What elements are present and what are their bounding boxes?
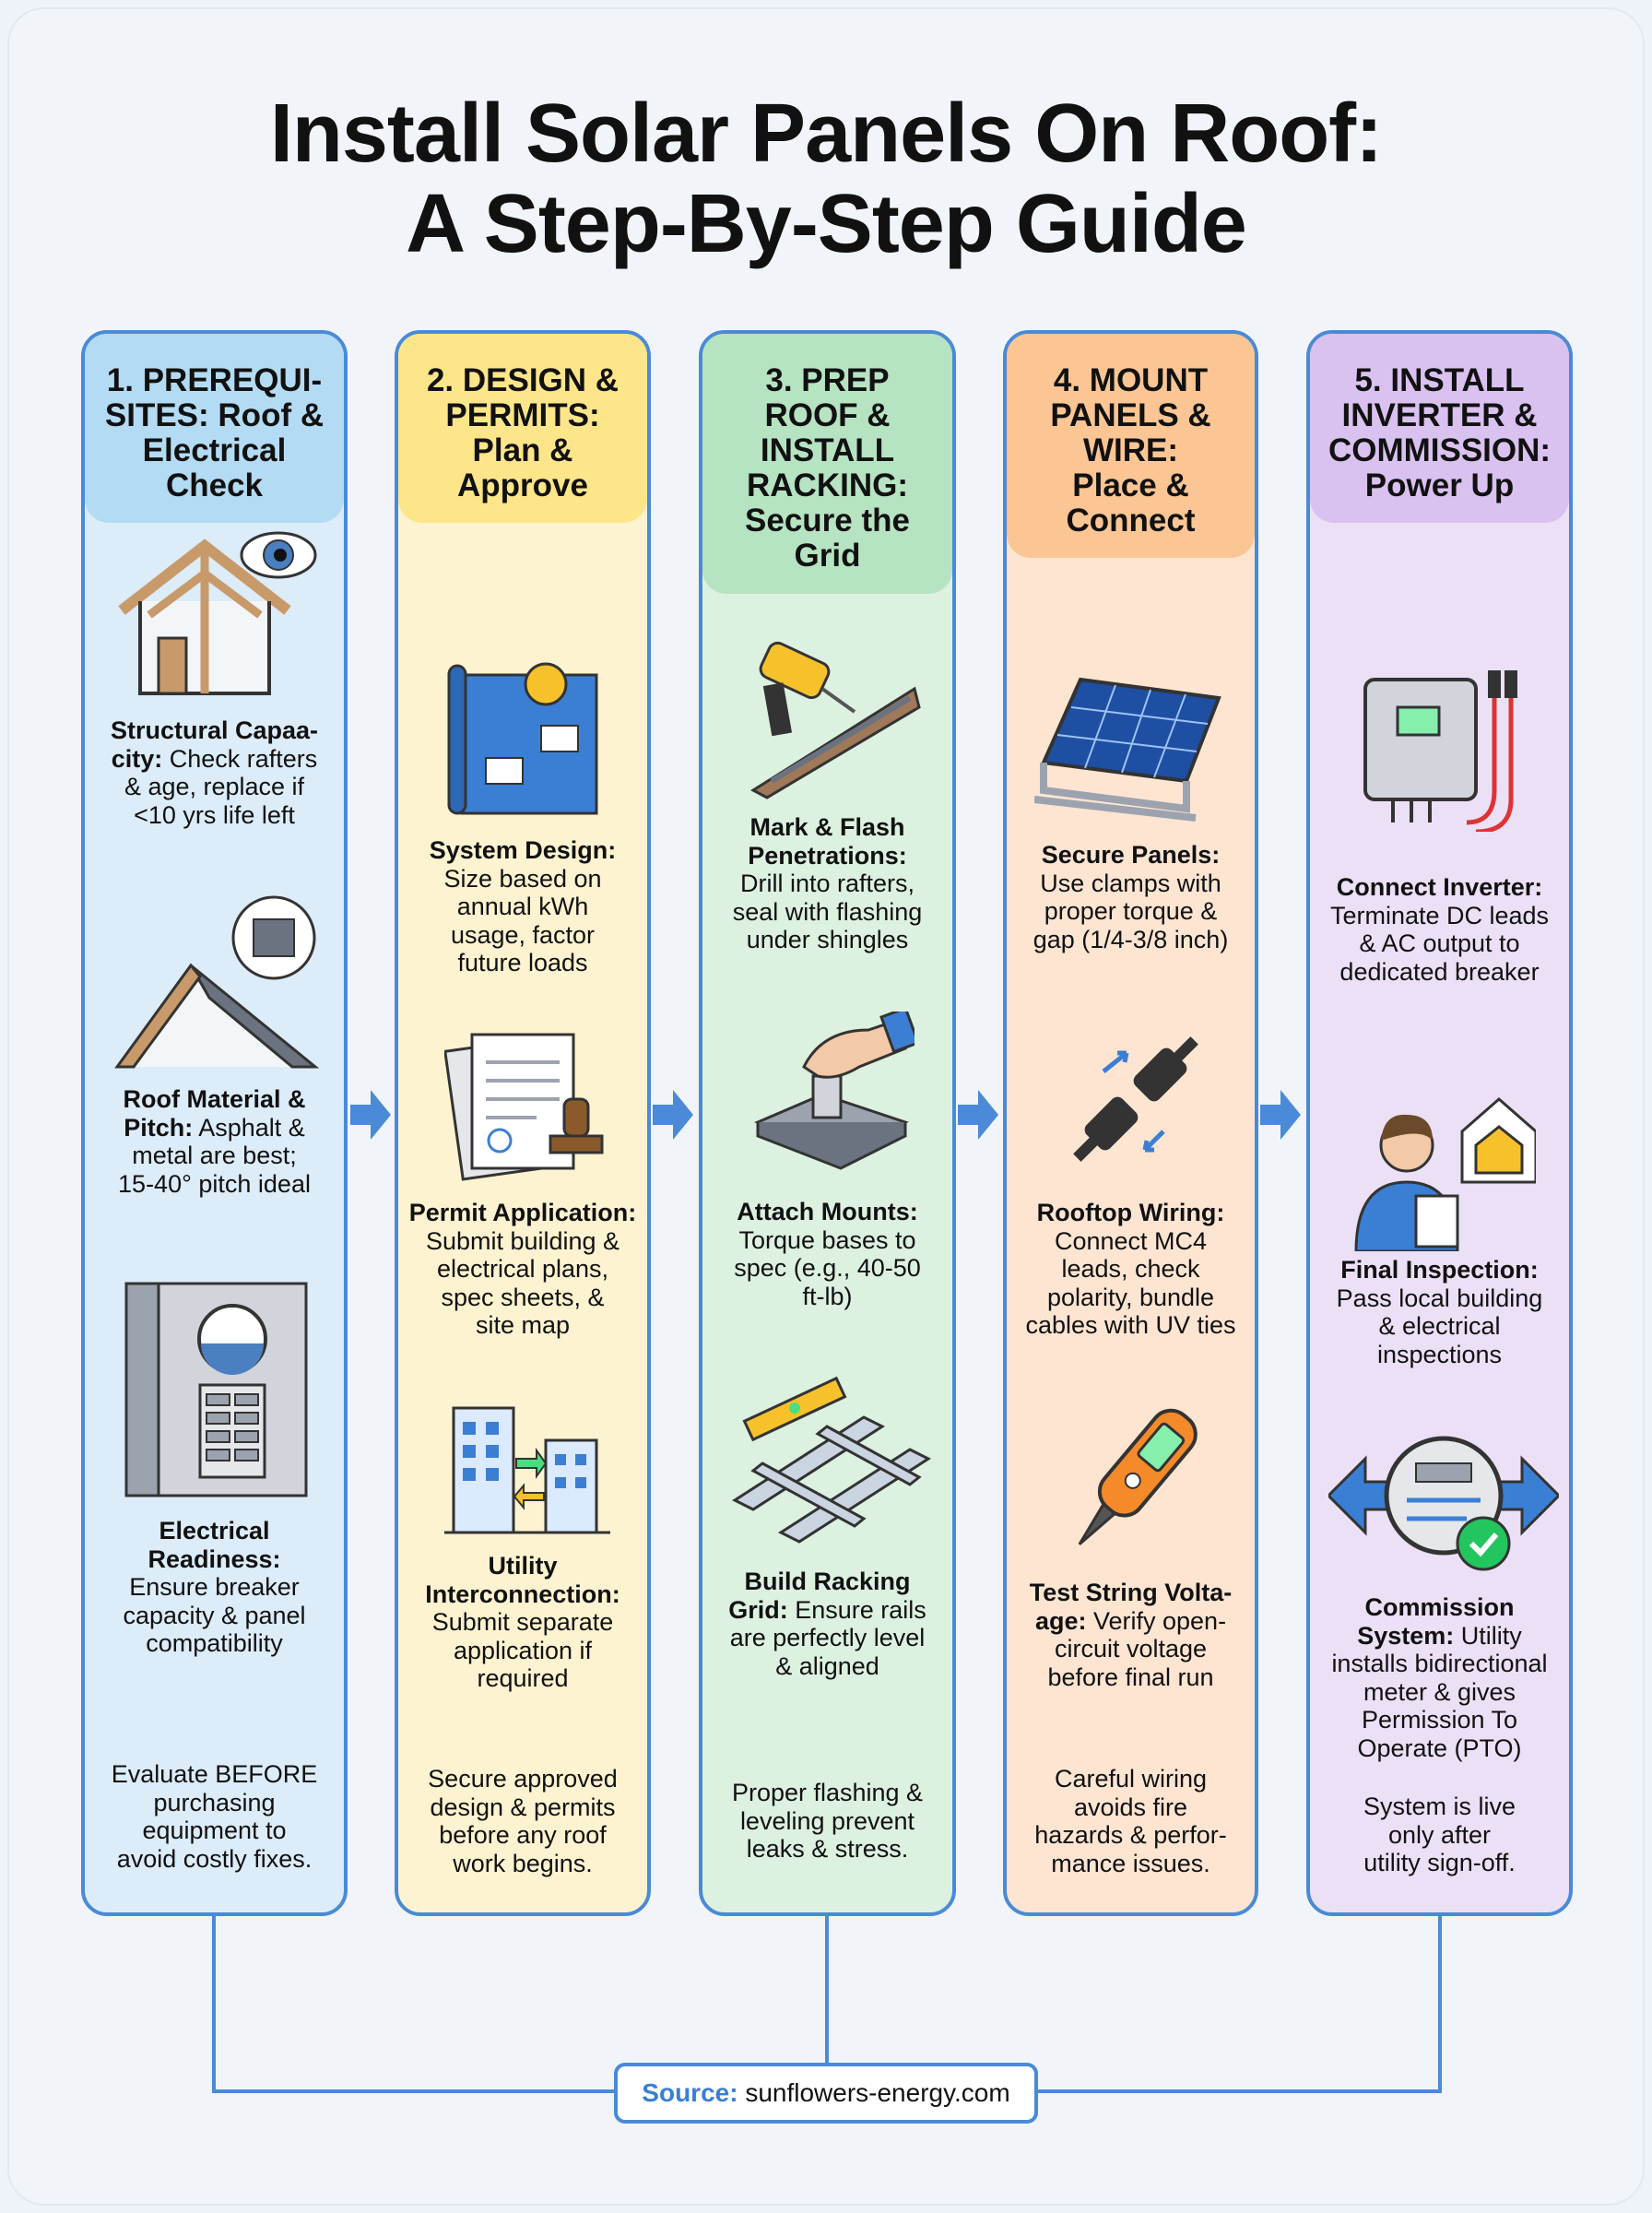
text: final inspection: Final Inspection: — [1340, 1256, 1539, 1284]
text: mark & flash: Drill into rafters, — [740, 870, 914, 897]
footer note 3 — [732, 1779, 923, 1863]
icon: mount with hand — [754, 1012, 914, 1170]
icon: racking rails and level — [732, 1376, 931, 1544]
footer note 4 — [1034, 1765, 1227, 1877]
header 3 — [702, 334, 952, 594]
header 2: 2. DESIGN & — [427, 362, 619, 398]
text: rooftop wiring: cables with UV ties — [1025, 1311, 1236, 1339]
text: build racking: Grid: Ensure rails — [728, 1596, 926, 1624]
text: commission system: installs bidirectional — [1331, 1650, 1548, 1677]
text: attach mounts: Attach Mounts: — [737, 1198, 918, 1225]
text: utility interconnection: Utility — [488, 1552, 557, 1580]
text: commission system: Commission — [1364, 1593, 1515, 1621]
source box — [614, 2063, 1038, 2124]
source box: Source: sunflowers-energy.com — [642, 2078, 1010, 2107]
text: mark & flash: under shingles — [747, 926, 908, 953]
text: test string voltage — [1030, 1579, 1232, 1691]
text: test string voltage: circuit voltage — [1055, 1635, 1207, 1663]
header 2: Plan & — [473, 432, 572, 468]
header 2 — [398, 334, 647, 523]
text: build racking: & aligned — [775, 1652, 879, 1680]
text: mark & flash: seal with flashing — [733, 898, 922, 926]
icon: inverter — [1363, 670, 1517, 832]
header 1: 1. PREREQUI- — [107, 362, 322, 398]
text: rooftop wiring: leads, check — [1061, 1255, 1200, 1283]
text: permit application: electrical plans, — [437, 1255, 608, 1283]
header 5: 5. INSTALL — [1354, 362, 1525, 398]
text: roof material: metal are best; — [132, 1142, 297, 1169]
header 1 — [85, 334, 344, 523]
text: permit application: Submit building & — [426, 1227, 620, 1255]
header 4 — [1007, 334, 1255, 558]
text: electrical readiness: compatibility — [146, 1629, 283, 1657]
icon: voltage tester — [1079, 1409, 1198, 1545]
header 5: Power Up — [1365, 467, 1514, 503]
text: system design: future loads — [457, 949, 588, 976]
text: utility interconnection — [425, 1552, 620, 1692]
text: structural capacity: city: Check rafters — [112, 745, 317, 773]
text: system design: usage, factor — [451, 921, 595, 949]
text: test string voltage: before final run — [1047, 1663, 1214, 1691]
footer note 5: utility sign-off. — [1363, 1849, 1516, 1876]
text: commission system: Operate (PTO) — [1357, 1734, 1522, 1762]
text: commission system: Permission To — [1362, 1706, 1517, 1734]
footer note 5: only after — [1388, 1821, 1491, 1849]
title: A Step-By-Step Guide — [406, 178, 1246, 270]
footer note 2: design & permits — [430, 1793, 616, 1821]
text: rooftop wiring: Connect MC4 — [1055, 1227, 1207, 1255]
text: system design: Size based on — [443, 865, 602, 893]
text: connect inverter: dedicated breaker — [1339, 958, 1540, 986]
text: permit application: Permit Application: — [409, 1199, 636, 1226]
text: utility interconnection: Interconnection: — [425, 1580, 620, 1608]
text: final inspection: inspections — [1377, 1341, 1502, 1368]
text: attach mounts: ft-lb) — [802, 1283, 852, 1310]
header 3: RACKING: — [747, 467, 908, 503]
text: attach mounts — [734, 1198, 921, 1310]
text: electrical readiness — [123, 1517, 306, 1657]
header 4: Connect — [1066, 503, 1195, 538]
footer note 3: leaks & stress. — [747, 1835, 908, 1863]
text: final inspection: & electrical — [1378, 1312, 1501, 1340]
text: test string voltage: age: Verify open- — [1035, 1607, 1226, 1635]
text: final inspection — [1337, 1256, 1542, 1368]
header 4: WIRE: — [1083, 432, 1178, 468]
text: rooftop wiring: polarity, bundle — [1047, 1284, 1214, 1311]
footer note 4: hazards & perfor- — [1034, 1821, 1227, 1849]
footer note 1: avoid costly fixes. — [117, 1845, 312, 1873]
footer note 4: Careful wiring — [1055, 1765, 1207, 1793]
text: secure panels — [1033, 841, 1228, 953]
header 3: 3. PREP — [765, 362, 890, 398]
icon: permit documents with stamp — [444, 1033, 603, 1181]
header 5: COMMISSION: — [1328, 432, 1551, 468]
panel: step 3 — [699, 330, 956, 1916]
footer note 1: Evaluate BEFORE — [112, 1760, 317, 1788]
text: rooftop wiring — [1025, 1199, 1236, 1339]
text: commission system: System: Utility — [1357, 1622, 1522, 1650]
text: roof material: Pitch: Asphalt & — [124, 1114, 305, 1142]
arrow 3 — [958, 1090, 998, 1140]
icon: utility buildings — [444, 1407, 610, 1534]
header 4: 4. MOUNT — [1054, 362, 1208, 398]
text: commission system — [1331, 1593, 1548, 1762]
text: secure panels: Secure Panels: — [1042, 841, 1220, 869]
footer note 1: equipment to — [142, 1817, 287, 1844]
title — [270, 88, 1382, 270]
icon: electrical panel — [125, 1282, 308, 1497]
icon: house frame with eye — [118, 531, 317, 695]
text: final inspection: Pass local building — [1337, 1284, 1542, 1312]
footer note 3: leveling prevent — [740, 1807, 914, 1835]
header 4: PANELS & — [1050, 397, 1211, 433]
panel: step 1 — [81, 330, 348, 1916]
icon: inspector with house — [1355, 1097, 1536, 1251]
header 3: Secure the — [745, 503, 910, 538]
icon: MC4 connectors — [1073, 1036, 1198, 1162]
footer note 5 — [1363, 1793, 1516, 1876]
text: system design: System Design: — [430, 836, 616, 864]
header 5 — [1310, 334, 1569, 523]
text: permit application: spec sheets, & — [441, 1284, 605, 1311]
arrow 1 — [350, 1090, 391, 1140]
icon: blueprint with sun — [448, 662, 597, 815]
text: electrical readiness: capacity & panel — [123, 1602, 306, 1629]
title: Install Solar Panels On Roof: — [270, 88, 1382, 180]
text: system design: annual kWh — [457, 893, 588, 920]
icon: solar panel on rails — [1034, 677, 1221, 822]
text: build racking: Build Racking — [744, 1568, 911, 1595]
text: permit application — [409, 1199, 636, 1339]
text: permit application: site map — [476, 1311, 570, 1339]
header 5: INVERTER & — [1342, 397, 1537, 433]
text: utility interconnection: required — [477, 1664, 569, 1692]
text: electrical readiness: Readiness: — [148, 1545, 281, 1573]
header 2: Approve — [457, 467, 588, 503]
header 3: INSTALL — [761, 432, 894, 468]
text: commission system: meter & gives — [1363, 1678, 1516, 1706]
text: utility interconnection: application if — [454, 1637, 592, 1664]
footer note 2 — [428, 1765, 618, 1877]
text: connect inverter: & AC output to — [1359, 929, 1520, 957]
header 1: SITES: Roof & — [105, 397, 324, 433]
text: attach mounts: spec (e.g., 40-50 — [734, 1254, 921, 1282]
text: mark & flash: Mark & Flash — [749, 813, 905, 841]
arrow 2 — [653, 1090, 693, 1140]
text: structural capacity — [111, 716, 318, 829]
text: structural capacity: <10 yrs life left — [134, 801, 295, 829]
text: structural capacity: & age, replace if — [124, 773, 304, 800]
text: attach mounts: Torque bases to — [738, 1226, 916, 1254]
text: secure panels: proper torque & — [1044, 897, 1217, 925]
text: connect inverter — [1330, 873, 1549, 986]
text: build racking: are perfectly level — [730, 1624, 925, 1651]
footer note 3: Proper flashing & — [732, 1779, 923, 1806]
text: connect inverter: Connect Inverter: — [1337, 873, 1542, 901]
header 1: Electrical — [143, 432, 286, 468]
footer note 1: purchasing — [153, 1789, 276, 1817]
icon: bidirectional meter — [1328, 1437, 1559, 1571]
text: mark & flash: Penetrations: — [748, 842, 907, 870]
text: roof material: 15-40° pitch ideal — [118, 1170, 311, 1198]
footer note 2: Secure approved — [428, 1765, 618, 1793]
icon: roof with shingle bubble — [114, 896, 319, 1068]
icon: drill on rafter — [750, 642, 921, 799]
panel: step 2 — [395, 330, 651, 1916]
text: mark & flash — [733, 813, 922, 953]
header 4: Place & — [1072, 467, 1189, 503]
arrow 4 — [1260, 1090, 1301, 1140]
footer note 2: work begins. — [453, 1850, 593, 1877]
text: system design — [430, 836, 616, 976]
panel: step 4 — [1003, 330, 1258, 1916]
text: electrical readiness: Ensure breaker — [129, 1573, 300, 1601]
text: secure panels: Use clamps with — [1040, 870, 1221, 897]
header 3: ROOF & — [764, 397, 891, 433]
text: roof material: Roof Material & — [123, 1085, 306, 1113]
footer note 2: before any roof — [439, 1821, 607, 1849]
text: roof material — [118, 1085, 311, 1198]
text: electrical readiness: Electrical — [159, 1517, 270, 1544]
panel: step 5 — [1306, 330, 1573, 1916]
header 3: Grid — [795, 538, 860, 574]
header 1: Check — [166, 467, 263, 503]
footer note 1 — [112, 1760, 317, 1873]
footer note 4: avoids fire — [1074, 1793, 1187, 1821]
text: structural capacity: Structural Capaa- — [111, 716, 318, 744]
text: utility interconnection: Submit separate — [432, 1608, 613, 1636]
text: connect inverter: Terminate DC leads — [1330, 902, 1549, 929]
text: build racking — [728, 1568, 926, 1680]
header 2: PERMITS: — [445, 397, 600, 433]
text: rooftop wiring: Rooftop Wiring: — [1037, 1199, 1224, 1226]
footer note 4: mance issues. — [1051, 1850, 1210, 1877]
footer note 5: System is live — [1363, 1793, 1516, 1820]
text: test string voltage: Test String Volta- — [1030, 1579, 1232, 1606]
text: secure panels: gap (1/4-3/8 inch) — [1033, 926, 1228, 953]
